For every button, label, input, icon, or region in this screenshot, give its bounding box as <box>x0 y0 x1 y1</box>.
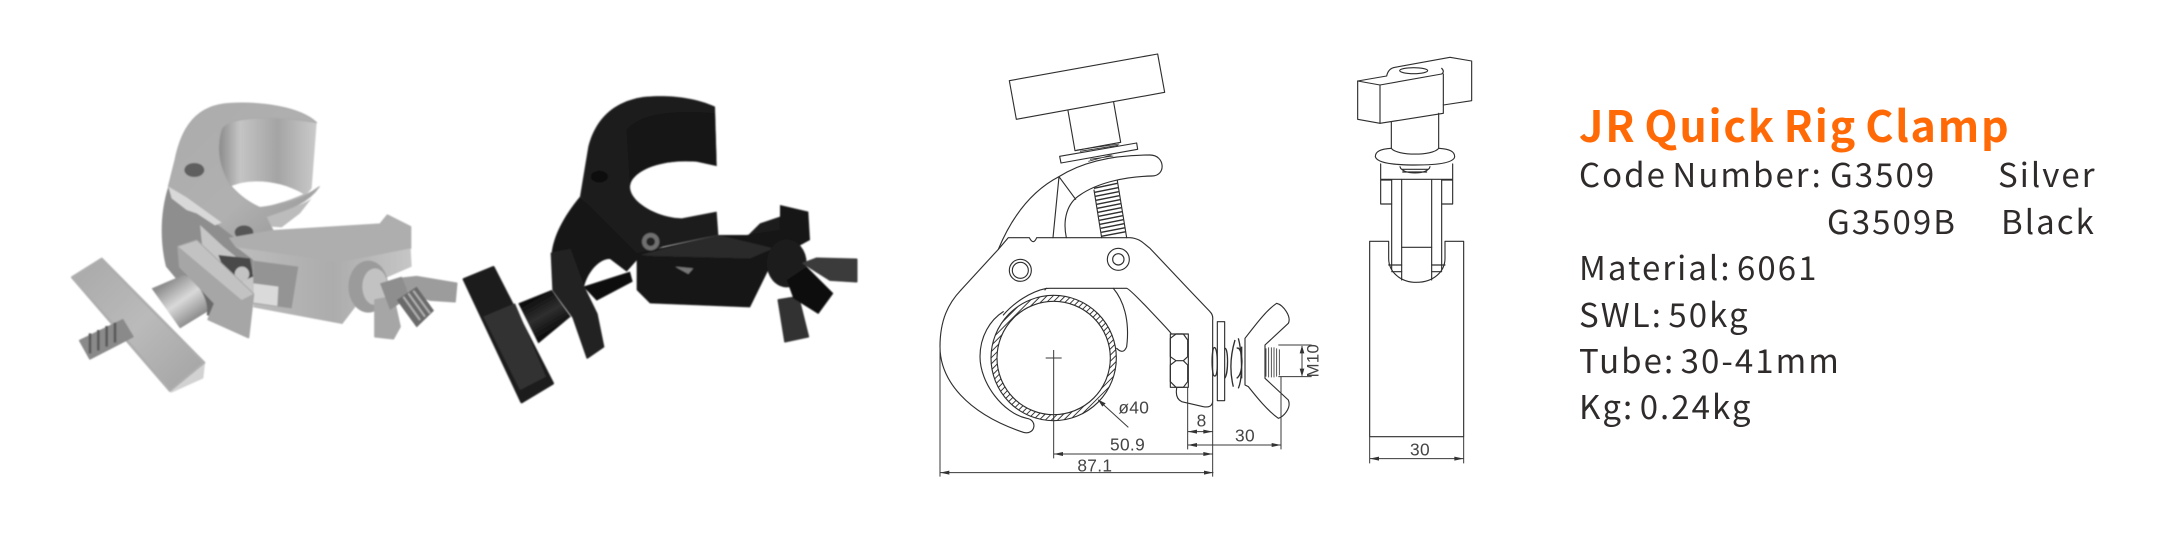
dimension 30 <box>1370 437 1464 463</box>
dia 40: ø40 <box>1118 397 1149 417</box>
dim 50.9: 50.9 <box>1110 434 1145 454</box>
weight: Kg: 0.24kg <box>1579 381 1753 429</box>
dim 50.9 <box>1054 434 1213 456</box>
rear jaw lip <box>747 217 780 237</box>
window <box>253 261 298 308</box>
side plates <box>1392 180 1442 280</box>
screw threads <box>1077 144 1119 161</box>
screw <box>80 320 133 359</box>
upper plate <box>580 96 718 257</box>
M10 dimension: M10 <box>1304 344 1323 377</box>
nut thread <box>1266 347 1279 377</box>
nut screw <box>397 287 434 327</box>
T knob <box>1358 57 1472 123</box>
rear body <box>162 187 253 303</box>
rivet <box>642 233 659 250</box>
pivot bolts <box>1009 248 1129 281</box>
dimension 30: 30 <box>1410 439 1430 459</box>
specification text block <box>1579 93 2097 429</box>
lower jaw top <box>230 215 411 262</box>
centre mark <box>1046 350 1062 458</box>
code number silver <box>1579 149 2097 197</box>
dim 8: 8 <box>1197 411 1207 431</box>
rear jaw lip <box>348 230 373 241</box>
window glint <box>675 267 693 274</box>
code number silver: G3509 <box>1830 149 1936 197</box>
knob <box>72 259 204 391</box>
lower jaw <box>637 205 810 307</box>
tube opening <box>232 181 303 207</box>
spacer washer <box>1217 322 1225 401</box>
body <box>1370 241 1464 437</box>
flange <box>1375 148 1455 165</box>
dim 30: 30 <box>1235 426 1255 446</box>
threaded rod <box>1094 181 1127 238</box>
lower hook inner <box>267 198 312 227</box>
stem <box>1391 113 1439 154</box>
M10 dimension <box>1278 344 1323 377</box>
stem <box>518 290 571 343</box>
dim 87.1 <box>940 456 1213 476</box>
jaw inner <box>627 112 717 187</box>
photo: silver clamp <box>72 103 457 393</box>
tube: Tube: 30-41mm <box>1579 335 1841 383</box>
photo: black clamp <box>464 96 857 402</box>
tube <box>991 288 1116 421</box>
jaw edge <box>1045 288 1171 333</box>
thread <box>1400 167 1430 173</box>
knob <box>464 267 553 402</box>
code number black: G3509B <box>1827 196 1957 244</box>
safe working load: SWL: 50kg <box>1579 289 1750 337</box>
washer <box>348 261 388 313</box>
bracket <box>1381 164 1453 204</box>
washer <box>767 239 807 287</box>
code number silver: Code Number: <box>1579 149 1823 197</box>
cam <box>178 241 253 337</box>
technical drawing: front view <box>940 54 1323 477</box>
dim 87.1: 87.1 <box>1077 456 1112 476</box>
wing nut <box>803 258 857 282</box>
upper jaw plate <box>168 103 319 238</box>
latch strip <box>168 187 222 225</box>
material: Material: 6061 <box>1579 242 1818 290</box>
code number black <box>1827 196 2096 244</box>
lower jaw side <box>237 247 412 324</box>
clamp body <box>940 290 1034 433</box>
upper jaw <box>998 155 1162 249</box>
wing nut <box>1245 303 1289 418</box>
cam lever <box>552 250 603 358</box>
pivot rivets <box>184 163 204 177</box>
springs <box>1212 338 1242 388</box>
technical drawing: side view <box>1358 57 1472 463</box>
dia 40 <box>1098 397 1149 427</box>
screw <box>583 272 633 301</box>
wing nut <box>402 277 457 302</box>
stem <box>1068 102 1121 151</box>
dim 30 <box>1188 426 1281 447</box>
code number black: Black <box>2001 196 2096 244</box>
cam hook <box>1113 288 1128 351</box>
stem <box>152 275 210 328</box>
left body <box>552 197 640 290</box>
knob <box>1009 54 1165 119</box>
dim 8 <box>1188 411 1213 434</box>
code number silver: Silver <box>1998 149 2097 197</box>
extension lines <box>940 347 1281 477</box>
hex nut <box>1170 334 1188 387</box>
washer <box>1060 143 1138 163</box>
jaw interior <box>219 118 317 227</box>
title: JR Quick Rig Clamp <box>1579 93 2011 155</box>
